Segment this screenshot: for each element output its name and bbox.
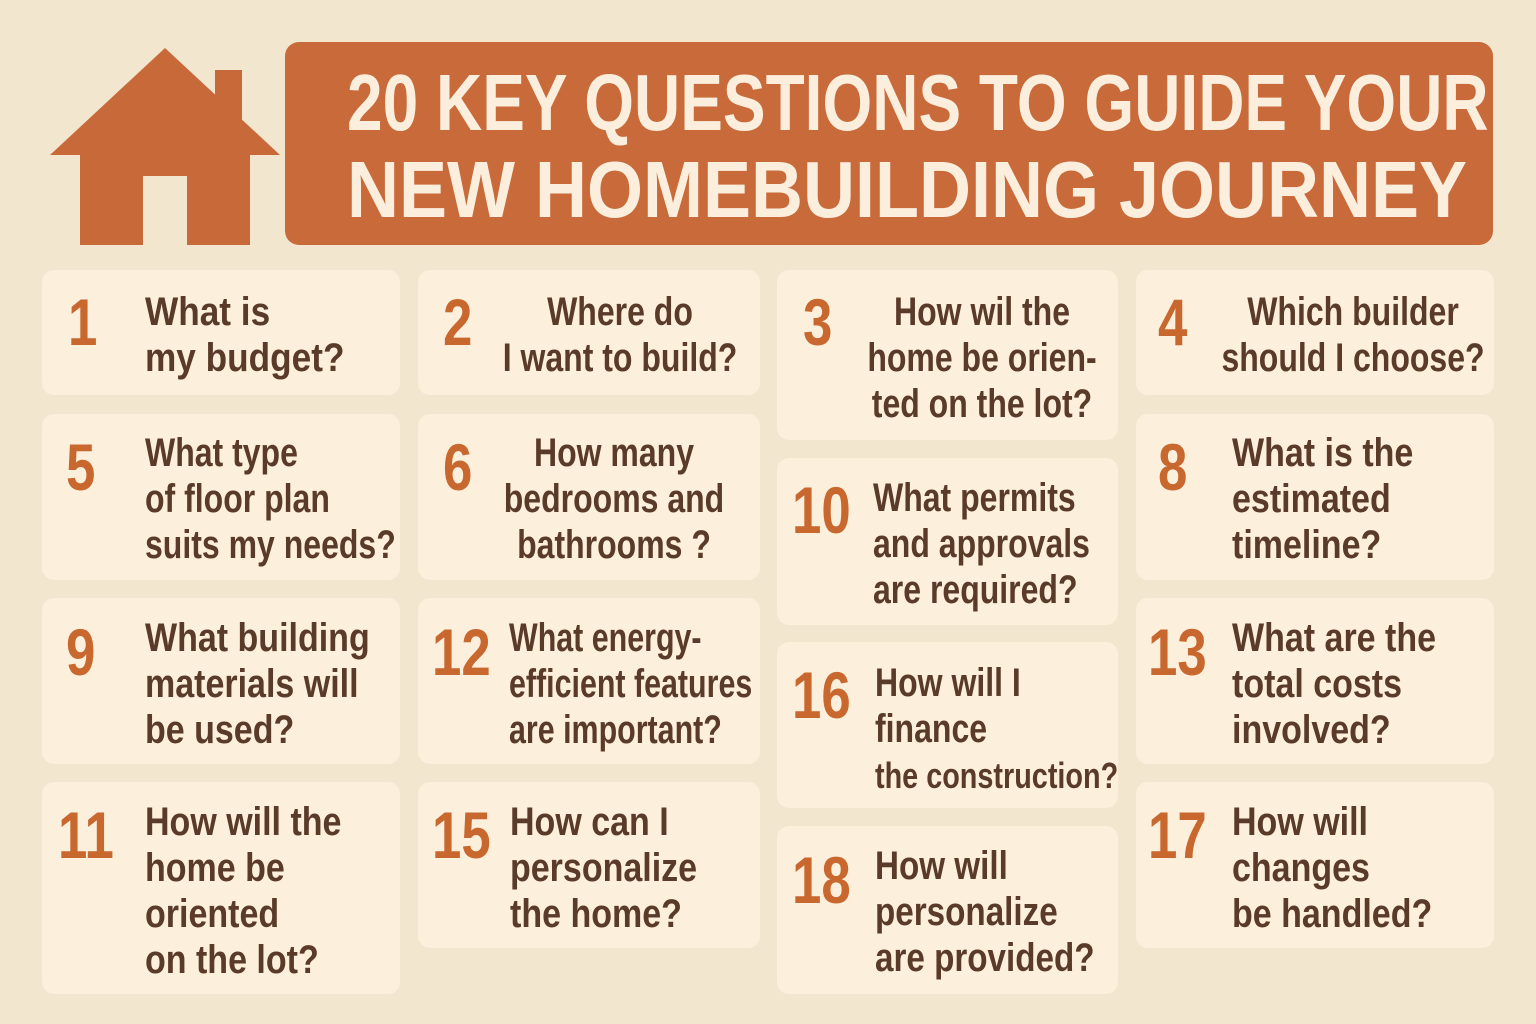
text: timeline? — [1232, 523, 1381, 567]
text: I want to build? — [503, 336, 737, 380]
text: efficient features — [509, 662, 752, 706]
text: 3 — [803, 285, 832, 359]
text: personalize — [875, 890, 1058, 934]
text: What are the — [1232, 616, 1436, 660]
text: 12 — [432, 615, 491, 689]
text: and approvals — [873, 522, 1090, 566]
text: suits my needs? — [145, 523, 396, 567]
text: 6 — [443, 430, 472, 504]
text: 13 — [1148, 615, 1207, 689]
text: What is the — [1232, 431, 1413, 475]
text: 11 — [58, 798, 114, 872]
text: involved? — [1232, 708, 1391, 752]
card 11 — [42, 782, 400, 994]
text: 15 — [432, 798, 491, 872]
text: should I choose? — [1221, 336, 1485, 380]
text: ted on the lot? — [872, 382, 1092, 426]
card 15 — [418, 782, 760, 948]
text: Where do — [547, 290, 693, 334]
text: 16 — [792, 658, 851, 732]
text: What building — [145, 616, 370, 660]
icon: house — [50, 48, 280, 245]
text: What energy- — [509, 616, 702, 660]
title: NEW HOMEBUILDING JOURNEY — [347, 145, 1467, 234]
card 5 — [42, 414, 400, 580]
text: How will — [1232, 800, 1368, 844]
text: are provided? — [875, 936, 1095, 980]
title — [285, 42, 1493, 245]
text: How will I — [875, 661, 1021, 705]
text: are important? — [509, 708, 722, 752]
text: 4 — [1158, 285, 1187, 359]
card 1 — [42, 270, 400, 395]
card 13 — [1136, 598, 1494, 764]
text: How many — [534, 431, 694, 475]
card 17 — [1136, 782, 1494, 948]
card 3 — [777, 270, 1118, 440]
text: 17 — [1148, 798, 1207, 872]
card 16 — [777, 642, 1118, 808]
card 18 — [777, 826, 1118, 994]
text: materials will — [145, 662, 359, 706]
title: 20 KEY QUESTIONS TO GUIDE YOUR — [347, 58, 1489, 147]
text: be used? — [145, 708, 294, 752]
card 6 — [418, 414, 760, 580]
text: How wil the — [894, 290, 1070, 334]
text: 2 — [443, 285, 472, 359]
card 10 — [777, 458, 1118, 625]
text: the home? — [510, 892, 682, 936]
text: personalize — [510, 846, 697, 890]
text: 9 — [66, 615, 95, 689]
text: finance — [875, 707, 987, 751]
text: bedrooms and — [504, 477, 724, 521]
text: How will the — [145, 800, 341, 844]
text: 18 — [792, 843, 851, 917]
card 9 — [42, 598, 400, 764]
text: 1 — [68, 285, 97, 359]
text: estimated — [1232, 477, 1391, 521]
text: What permits — [873, 476, 1076, 520]
text: How can I — [510, 800, 669, 844]
text: Which builder — [1247, 290, 1459, 334]
text: 8 — [1158, 430, 1187, 504]
text: on the lot? — [145, 938, 319, 982]
text: of floor plan — [145, 477, 330, 521]
text: bathrooms ? — [517, 523, 711, 567]
text: 5 — [66, 430, 95, 504]
card 12 — [418, 598, 760, 764]
text: home be — [145, 846, 285, 890]
text: be handled? — [1232, 892, 1432, 936]
text: changes — [1232, 846, 1370, 890]
card 4 — [1136, 270, 1494, 395]
text: total costs — [1232, 662, 1402, 706]
text: home be orien- — [867, 336, 1097, 380]
text: oriented — [145, 892, 279, 936]
text: What type — [145, 431, 298, 475]
text: What is — [145, 290, 270, 334]
text: are required? — [873, 568, 1078, 612]
text: the construction? — [875, 755, 1118, 796]
card 2 — [418, 270, 760, 395]
card 8 — [1136, 414, 1494, 580]
text: 10 — [792, 473, 851, 547]
text: my budget? — [145, 336, 344, 380]
text: How will — [875, 844, 1008, 888]
